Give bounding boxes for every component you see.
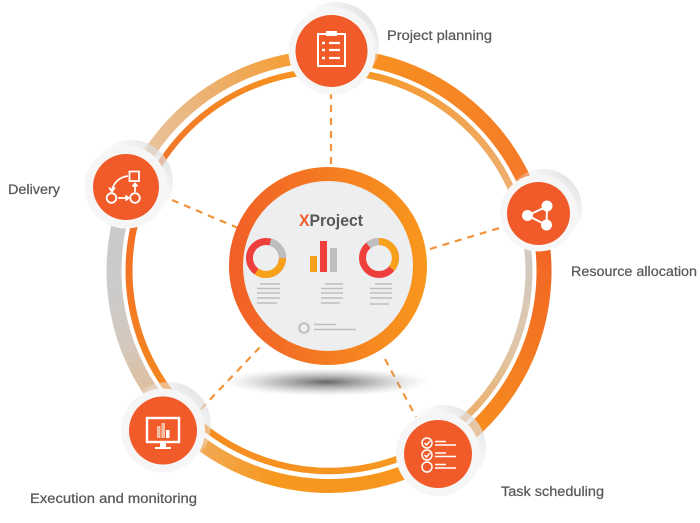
left text lines xyxy=(257,284,280,303)
left donut chart xyxy=(250,242,282,275)
icon: checklist xyxy=(422,438,456,472)
icon: clipboard xyxy=(318,31,345,66)
central hub xyxy=(229,167,427,365)
middle text lines xyxy=(321,284,343,303)
label: execution and monitoring: Execution and monitoring xyxy=(30,491,197,506)
right text lines xyxy=(370,284,392,304)
label: project planning: Project planning xyxy=(387,28,492,43)
icon: monitor xyxy=(147,418,179,449)
node: project planning xyxy=(288,2,379,94)
icon: workflow xyxy=(107,172,140,203)
inner ring xyxy=(129,71,529,471)
label: delivery: Delivery xyxy=(8,182,60,197)
hub title: XProject xyxy=(299,212,363,230)
outer ring xyxy=(114,56,544,486)
node: resource allocation xyxy=(500,169,582,252)
label: task scheduling: Task scheduling xyxy=(501,484,604,499)
node: task scheduling xyxy=(396,405,486,496)
dashed connectors xyxy=(172,92,506,417)
hub footer legend xyxy=(299,323,356,333)
right donut chart xyxy=(362,242,396,274)
icon: share xyxy=(522,200,552,230)
node: delivery xyxy=(84,140,173,228)
node: execution and monitoring xyxy=(121,382,211,472)
bar chart xyxy=(310,241,337,272)
label: resource allocation: Resource allocation xyxy=(571,264,697,279)
floor shadow xyxy=(222,368,430,396)
